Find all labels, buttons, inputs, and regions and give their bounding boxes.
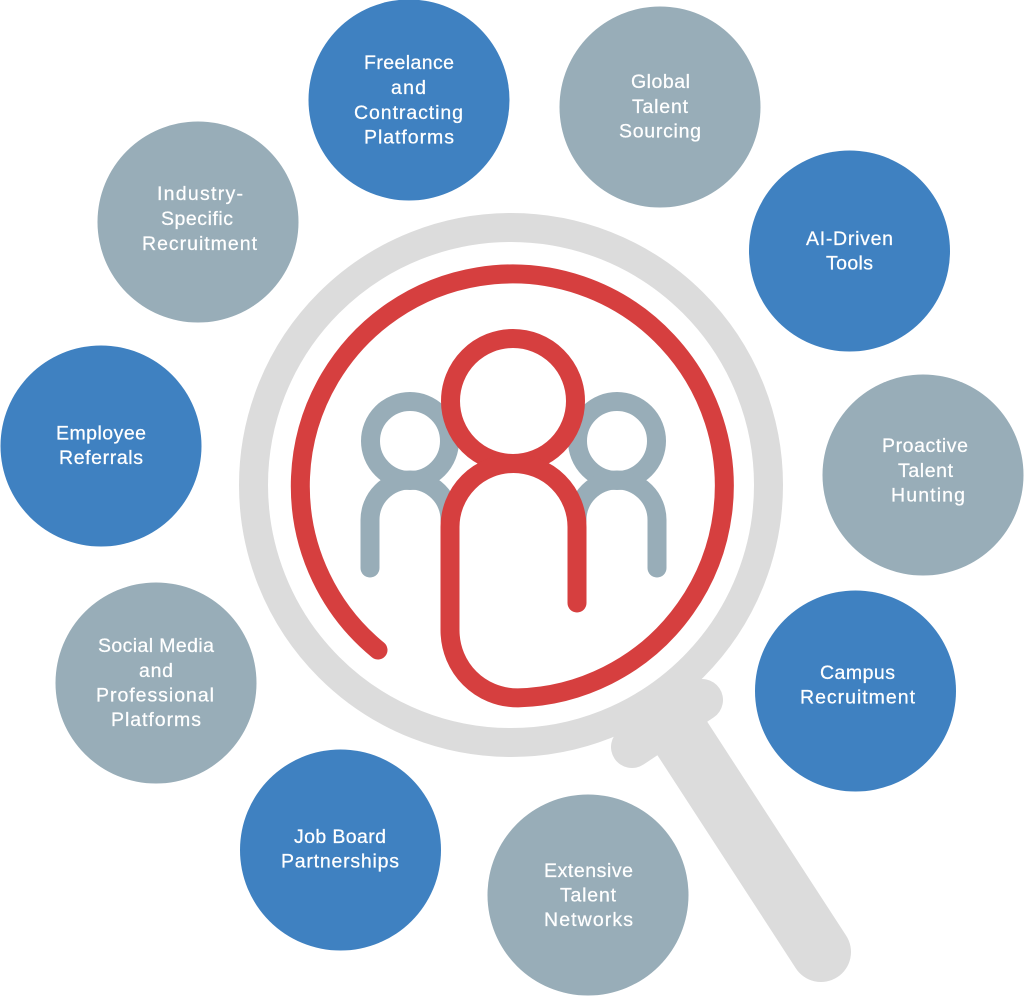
circle: Employee Referrals: Employee — [56, 422, 146, 444]
circle: Industry-Specific Recruitment — [98, 122, 298, 322]
circle: Job Board Partnerships: Job Board — [294, 826, 386, 848]
circle: Freelance and Contracting Platforms: Contracting — [354, 102, 463, 124]
circle: Social Media and Professional Platforms: Platforms — [111, 709, 201, 731]
circle: Freelance and Contracting Platforms — [308, 0, 510, 200]
circle: Industry-Specific Recruitment: Recruitment — [142, 233, 258, 255]
circle: Extensive Talent Networks: Networks — [544, 909, 633, 931]
circle: Freelance and Contracting Platforms: Platforms — [364, 126, 454, 148]
circle: Industry-Specific Recruitment: Specific — [161, 208, 233, 230]
circle: Social Media and Professional Platforms: Social Media — [98, 635, 214, 657]
circle: Proactive Talent Hunting: Talent — [898, 460, 954, 482]
circle: Freelance and Contracting Platforms: and — [391, 77, 426, 99]
circle: Extensive Talent Networks: Extensive — [544, 860, 633, 882]
circle: Social Media and Professional Platforms: Professional — [96, 684, 214, 706]
circle: Extensive Talent Networks: Talent — [560, 884, 617, 906]
circle: Freelance and Contracting Platforms: Freelance — [364, 52, 454, 74]
circle: Social Media and Professional Platforms: and — [139, 660, 173, 682]
icon: central person and lens arc — [300, 274, 724, 698]
circle: Employee Referrals — [0, 346, 202, 546]
circle: Proactive Talent Hunting: Hunting — [891, 484, 965, 506]
circle: Social Media and Professional Platforms — [56, 582, 256, 784]
circle: Global Talent Sourcing: Sourcing — [619, 120, 701, 142]
circle: Proactive Talent Hunting: Proactive — [882, 435, 968, 457]
circle: Global Talent Sourcing: Talent — [632, 96, 689, 118]
circle: Employee Referrals: Referrals — [59, 447, 143, 469]
circle: Proactive Talent Hunting — [822, 374, 1024, 576]
circle: Global Talent Sourcing: Global — [631, 71, 690, 93]
circle: Campus Recruitment: Campus — [820, 662, 895, 684]
circle: Job Board Partnerships — [240, 750, 441, 950]
circle: AI-Driven Tools: AI-Driven — [806, 228, 893, 250]
circle: AI-Driven Tools — [749, 150, 950, 352]
icon: right team member — [577, 402, 657, 568]
circle: Global Talent Sourcing — [560, 6, 760, 208]
circle: Campus Recruitment — [755, 590, 956, 792]
circle: AI-Driven Tools: Tools — [826, 252, 873, 274]
circle: Extensive Talent Networks — [488, 794, 688, 996]
icon: left team member — [370, 402, 450, 568]
circle: Industry-Specific Recruitment: Industry- — [157, 183, 243, 205]
circle: Job Board Partnerships: Partnerships — [281, 850, 399, 872]
circle: Campus Recruitment: Recruitment — [800, 686, 916, 708]
magnifying glass — [254, 228, 821, 952]
